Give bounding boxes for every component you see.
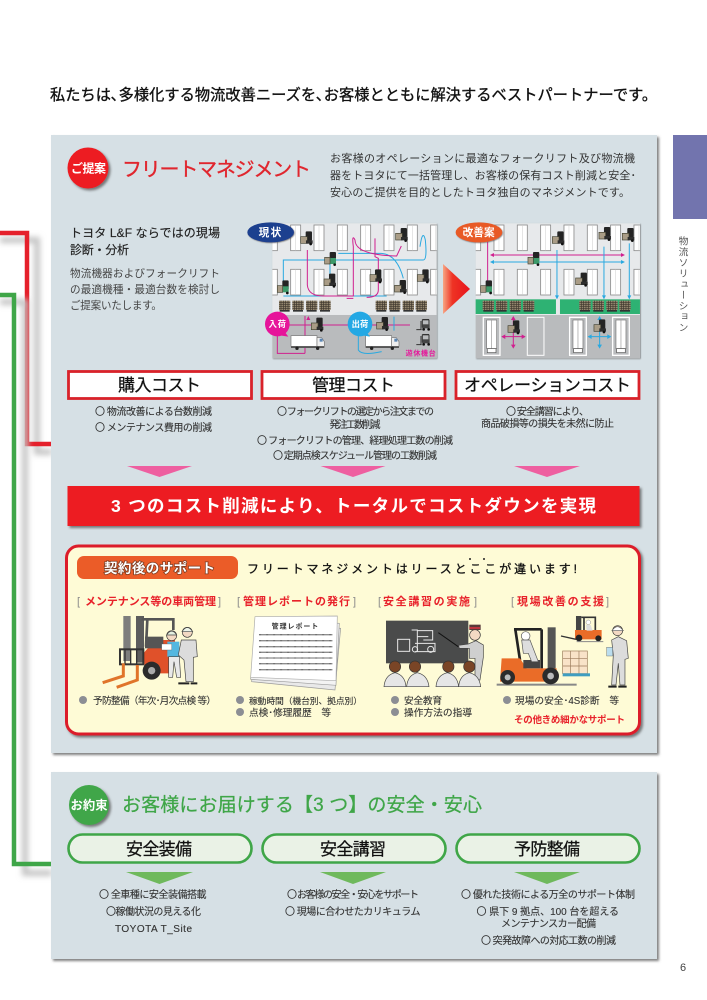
subheading: site improvement: ]	[606, 596, 609, 608]
outbound label	[348, 312, 372, 337]
cost box: purchase: 購入コスト	[118, 376, 201, 395]
cost reduction banner: 3 つのコスト削減により、トータルでコストダウンを実現	[111, 496, 596, 516]
illustration: report sheets: 管理レポート	[272, 622, 318, 631]
subheading: reports: [	[237, 596, 240, 608]
pill: preventive maintenance: 予防整備	[514, 840, 580, 859]
equipment notes: 〇 全車種に安全装備搭載	[99, 888, 206, 901]
bullets: report contents: 点検･修理履歴 等	[249, 706, 331, 719]
intro text: 器をトヨタにて一括管理し、お客様の保有コスト削減と安全･	[330, 168, 636, 182]
management cost notes: 〇 フォークリフトの管理、経理処理工数の削減	[257, 434, 453, 447]
training notes: 〇 現場に合わせたカリキュラム	[285, 905, 420, 918]
pill: safety equipment	[68, 834, 252, 862]
support headline: フリートマネジメントはリースとここが違います!	[247, 561, 577, 576]
operation cost notes: 商品破損等の損失を未然に防止	[481, 417, 614, 430]
bullet: site diagnosis: 現場の安全･4S診断 等	[515, 694, 619, 707]
subheading: reports: ]	[353, 596, 356, 608]
subheading: maintenance: メンテナンス等の車両管理	[85, 594, 216, 608]
subheading: maintenance: [	[77, 596, 80, 608]
equipment notes	[99, 888, 206, 935]
bullets: report contents	[236, 695, 362, 719]
panel: fleet management	[51, 135, 686, 974]
green connector line	[0, 295, 52, 873]
bullet: preventive maintenance: 予防整備（年次･月次点検 等）	[93, 694, 216, 707]
cost box: management	[262, 372, 445, 398]
promise badge: お約束	[70, 798, 108, 812]
intro text: お客様のオペレーションに最適なフォークリフト及び物流機	[330, 151, 635, 165]
illustration: report sheets	[251, 616, 341, 690]
equipment notes: TOYOTA T_Site	[115, 924, 192, 935]
other support note: その他きめ細かなサポート	[514, 714, 625, 726]
pill: safety training	[262, 834, 446, 862]
current label	[247, 222, 294, 242]
improved label	[456, 222, 502, 242]
red connector line	[0, 233, 52, 452]
cost box: management: 管理コスト	[312, 376, 395, 395]
side label: vertical section name: 物流ソリューション	[676, 235, 688, 333]
support tag: 契約後のサポート	[104, 560, 215, 576]
operation cost notes	[481, 405, 614, 430]
bullets: report contents: 稼動時間（機台別、拠点別）	[249, 695, 362, 706]
subheading: safety training: [	[378, 596, 381, 608]
training notes	[285, 888, 420, 918]
current label: 現状	[259, 226, 282, 239]
maintenance notes: 〇 突発故障への対応工数の削減	[481, 934, 616, 947]
arrow: training down	[320, 872, 386, 884]
cost box: operation	[456, 372, 639, 398]
diagnosis text block: ご提案いたします。	[70, 299, 162, 312]
pill: preventive maintenance	[456, 834, 640, 862]
page number: 6	[680, 962, 686, 974]
purchase cost notes: 〇 メンテナンス費用の削減	[95, 421, 212, 434]
arrow: maintenance down	[514, 872, 580, 884]
arrow: current to improved	[443, 264, 470, 314]
arrow: operation down	[514, 466, 580, 477]
diagnosis text block: トヨタ L&F ならではの現場	[70, 226, 220, 240]
management cost notes: 〇 定期点検スケジュール管理の工数削減	[273, 449, 437, 462]
panel: after-contract support	[66, 546, 640, 734]
maintenance notes: 〇 優れた技術による万全のサポート体制	[461, 888, 635, 901]
cost box: purchase	[68, 372, 252, 398]
arrow: purchase down	[127, 466, 192, 477]
management cost notes	[257, 405, 453, 462]
idle machines label: 遊休機台	[406, 349, 436, 358]
purchase cost notes	[95, 405, 212, 434]
support tag	[77, 556, 238, 579]
management cost notes: 発注工数削減	[330, 418, 380, 431]
improved label: 改善案	[463, 226, 495, 239]
panel heading: お客様にお届けする【3 つ】の安全・安心	[122, 794, 482, 816]
diagnosis text block: 診断・分析	[70, 242, 129, 257]
side tab	[673, 135, 707, 219]
diagram: improved state	[456, 222, 644, 358]
diagnosis text block: の最適機種・最適台数を検討し	[70, 283, 220, 296]
subheading: safety training: 安全講習の実施	[383, 594, 470, 608]
proposal badge: ご提案	[71, 160, 106, 176]
arrow: management down	[320, 466, 386, 477]
panel: three safety promises	[51, 772, 657, 959]
illustration: safety training class	[384, 621, 483, 687]
maintenance notes: メンテナンスカー配備	[501, 918, 596, 930]
maintenance notes: 〇 県下 9 拠点、100 台を超える	[476, 905, 619, 918]
lead headline: 私たちは､多様化する物流改善ニーズを､お客様とともに解決するベストパートナーです。	[50, 86, 657, 104]
proposal badge	[68, 148, 108, 188]
training notes: 〇 お客様の安全・安心をサポート	[287, 888, 419, 901]
diagram: current state	[247, 222, 441, 358]
bullets: training contents	[391, 694, 472, 719]
promise badge	[69, 785, 109, 825]
intro text	[330, 151, 636, 199]
panel heading: フリートマネジメント	[122, 159, 311, 181]
bullets: training contents: 安全教育	[404, 694, 442, 707]
cost reduction banner	[68, 486, 640, 526]
subheading: site improvement: [	[511, 596, 514, 608]
arrow: equipment down	[126, 872, 193, 884]
inbound label	[265, 312, 290, 337]
bullets: training contents: 操作方法の指導	[404, 706, 472, 719]
inbound label: 入荷	[269, 319, 286, 329]
outbound label: 出荷	[352, 319, 368, 329]
pill: safety equipment: 安全装備	[126, 840, 192, 859]
diagnosis text block: 物流機器およびフォークリフト	[70, 267, 220, 280]
intro text: 安心のご提供を目的としたトヨタ独自のマネジメントです。	[330, 185, 630, 199]
subheading: safety training: ]	[474, 596, 477, 608]
pill: safety training: 安全講習	[320, 840, 386, 859]
subheading: reports: 管理レポートの発行	[243, 594, 350, 608]
subheading: maintenance: ]	[218, 596, 221, 608]
illustration: forklift maintenance	[103, 616, 197, 687]
purchase cost notes: 〇 物流改善による台数削減	[95, 405, 212, 418]
equipment notes: 〇稼働状況の見える化	[106, 905, 201, 918]
cost box: operation: オペレーションコスト	[464, 376, 631, 395]
maintenance notes	[461, 888, 635, 947]
management cost notes: 〇 フォークリフトの選定から注文までの	[277, 405, 434, 418]
subheading: site improvement: 現場改善の支援	[517, 594, 604, 608]
illustration: site improvement forklift	[497, 616, 628, 687]
operation cost notes: 〇 安全講習により、	[506, 405, 589, 418]
diagnosis text block	[70, 226, 220, 312]
